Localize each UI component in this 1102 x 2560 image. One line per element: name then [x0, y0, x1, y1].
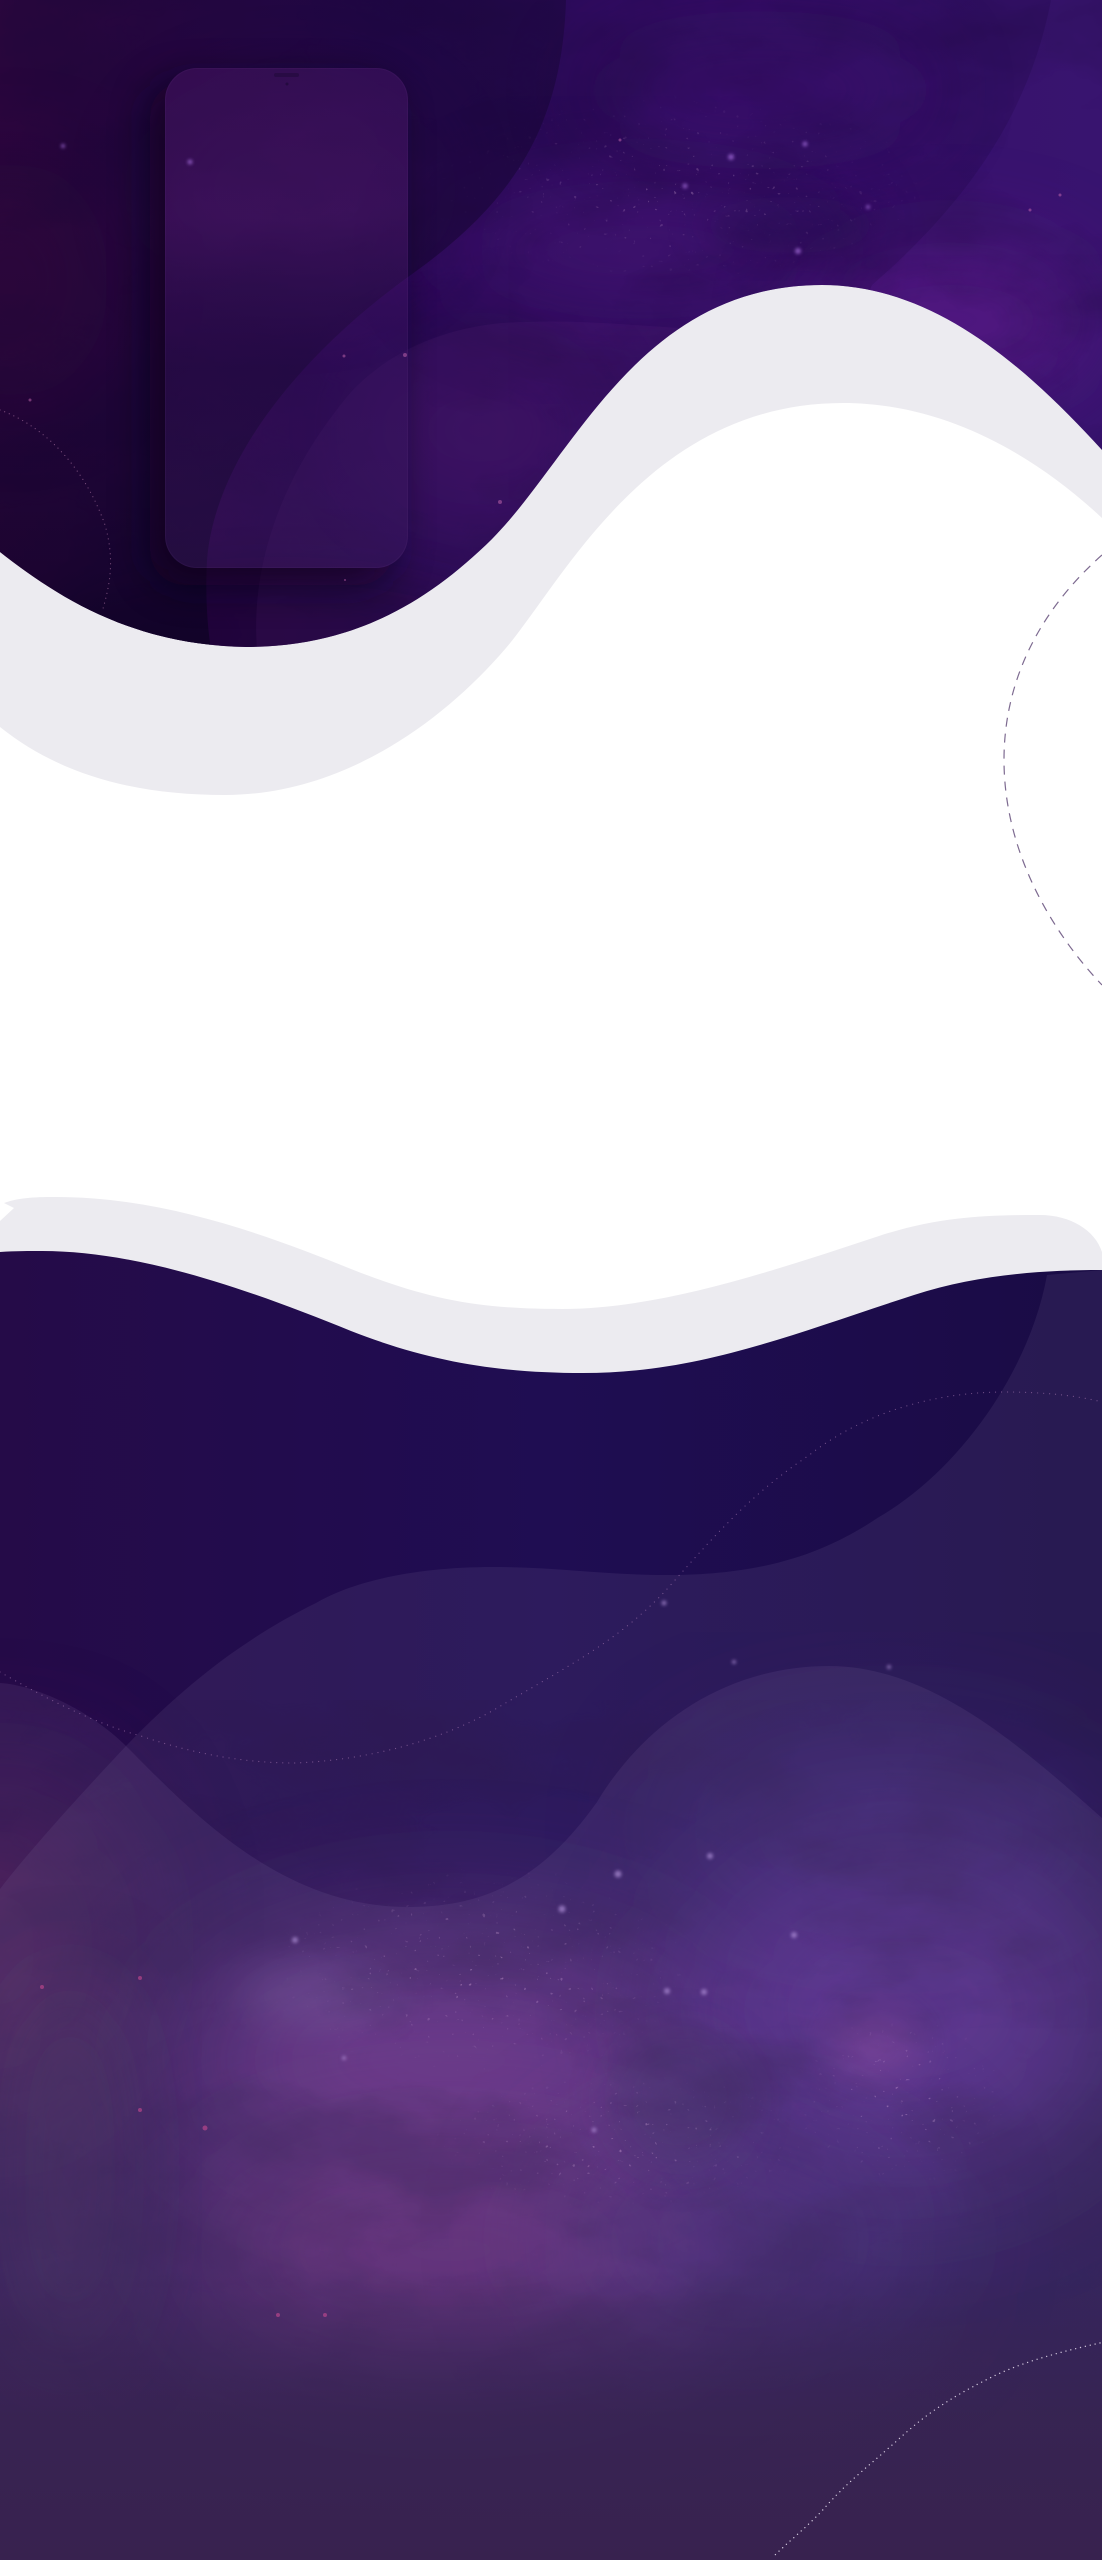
- light wave band: top: [0, 285, 1102, 795]
- wave shape: right dark overlay: [237, 0, 1050, 647]
- star dust: top: [496, 107, 892, 271]
- panel: top galaxy: [0, 0, 1102, 700]
- bottom fade: [0, 2270, 1102, 2560]
- star dust: bottom: [0, 1400, 1102, 2400]
- dotted curve: bottom right: [773, 2343, 1100, 2557]
- wave shape: middle light overlay: [0, 1270, 1102, 2560]
- dotted arc: left: [0, 410, 111, 612]
- light wave band: bottom: [0, 1197, 1102, 1400]
- wave shape: left dark overlay: [0, 0, 566, 650]
- wave shape: lower light overlay: [0, 1666, 1102, 2560]
- icon: phone mockup: [165, 68, 408, 568]
- phone shadow: [150, 82, 393, 585]
- nebula glow: bottom: [0, 1700, 1102, 2400]
- stars: top: [28, 138, 1062, 581]
- nebula glow: top: [60, 0, 1102, 647]
- stars: bottom: [40, 1600, 891, 2317]
- wave shape: lower light overlay: [256, 552, 460, 646]
- dashed arc: right: [1004, 555, 1102, 985]
- panel: bottom galaxy: [0, 1240, 1102, 2560]
- dotted curve: middle: [0, 1392, 1102, 1763]
